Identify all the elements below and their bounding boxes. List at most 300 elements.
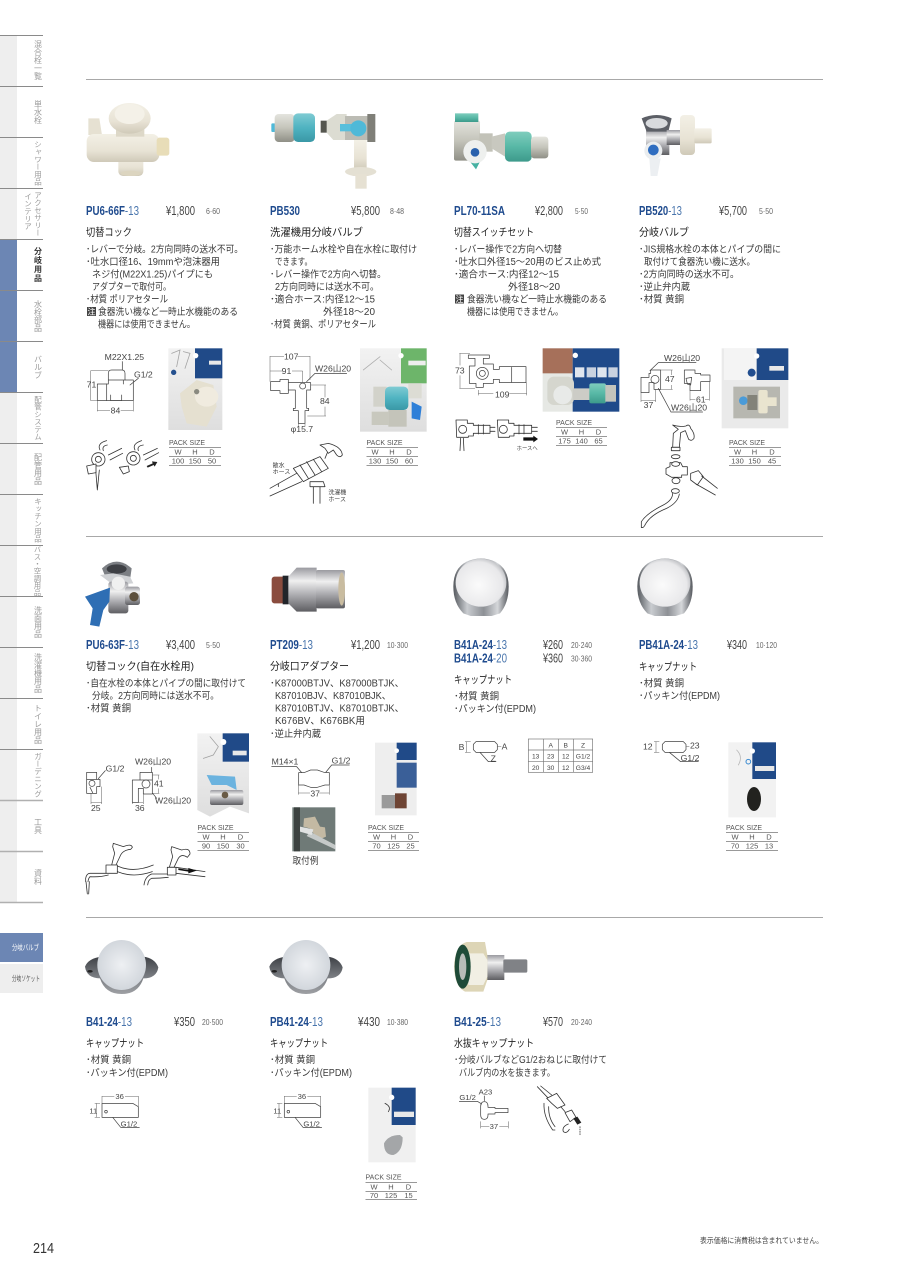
pack quantity: 10·300 bbox=[387, 640, 408, 650]
pack quantity: 10·380 bbox=[387, 1017, 408, 1027]
photo: cap nut with ears bbox=[269, 940, 343, 994]
size table: 12 bbox=[562, 765, 570, 772]
dimension drawing: 23 bbox=[690, 741, 700, 751]
product: PB41-24-13 bbox=[269, 940, 417, 1200]
pack size table: 15 bbox=[404, 1191, 413, 1200]
product: PB41A-24-13 bbox=[637, 558, 778, 850]
dimension drawing: 61 bbox=[696, 394, 706, 404]
installation sketch bbox=[270, 443, 346, 503]
product name: 切替コック bbox=[86, 226, 132, 238]
pack size table: 150 bbox=[386, 456, 398, 466]
size table bbox=[528, 739, 593, 772]
package photo bbox=[375, 743, 417, 815]
product: PB520-13 bbox=[639, 115, 788, 528]
model number: B41-25-13 bbox=[454, 1014, 501, 1029]
pack size table: 175 bbox=[558, 436, 571, 446]
specifications bbox=[86, 242, 243, 330]
specifications: 外径18〜20 bbox=[508, 280, 561, 293]
dimension drawing: G1/2 bbox=[134, 369, 153, 379]
specifications: ･材質 黄銅、ポリアセタール bbox=[270, 318, 376, 330]
sub tab: 分岐バルブ: 分岐バルブ bbox=[12, 942, 39, 952]
dimension drawing: 11 bbox=[273, 1106, 281, 1115]
specifications: ･自在水栓の本体とパイプの間に取付けて bbox=[86, 676, 246, 690]
dimension drawing: 71 bbox=[87, 379, 96, 389]
sidebar navigation tabs: ガーデニング bbox=[33, 752, 42, 798]
pack size table: PACK SIZE bbox=[198, 825, 234, 832]
package photo bbox=[168, 348, 222, 430]
dimension drawing bbox=[273, 1092, 322, 1129]
sidebar navigation tabs: 混合栓一覧 bbox=[34, 40, 42, 81]
pack size table: W bbox=[174, 448, 182, 456]
photo: chrome cap nut bbox=[453, 558, 509, 616]
size table: G3/4 bbox=[576, 765, 591, 772]
sidebar navigation tabs: 配管用品 bbox=[34, 453, 42, 486]
dimension drawing: 109 bbox=[495, 389, 510, 399]
pack quantity: 5·50 bbox=[206, 640, 220, 650]
specifications: ･材質 黄銅 bbox=[86, 1053, 131, 1066]
pack quantity: 5·50 bbox=[575, 206, 588, 216]
product: PL70-11SA bbox=[454, 113, 619, 452]
specifications: 食器洗い機など一時止水機能のある bbox=[467, 292, 607, 306]
size table: A bbox=[548, 742, 553, 749]
pack size table: W bbox=[371, 448, 379, 456]
pack size table: 125 bbox=[385, 1191, 397, 1200]
pack size table: D bbox=[769, 448, 775, 456]
pack size table: D bbox=[408, 832, 414, 842]
pack size table: 150 bbox=[189, 456, 201, 466]
size table: B bbox=[563, 742, 568, 749]
specifications: ･材質 黄銅 bbox=[639, 676, 684, 690]
photo: cream switching cock bbox=[87, 103, 169, 176]
pack size table: H bbox=[579, 428, 584, 436]
dimension drawing: 91 bbox=[282, 366, 291, 376]
dimension drawing bbox=[87, 757, 191, 813]
product: B41-25-13 bbox=[454, 942, 607, 1135]
dimension drawing: W26山20 bbox=[155, 796, 191, 806]
pack size table bbox=[729, 440, 781, 466]
product name: 分岐口アダプター bbox=[270, 660, 349, 672]
specifications bbox=[639, 676, 720, 702]
package photo bbox=[722, 348, 788, 428]
sidebar navigation tabs: 水栓部品 bbox=[34, 299, 42, 333]
pack size table: H bbox=[391, 832, 396, 842]
size table: 30 bbox=[547, 765, 555, 772]
pack size table: 30 bbox=[236, 842, 245, 850]
sidebar navigation tabs: 分岐用品 bbox=[34, 246, 42, 283]
specifications bbox=[639, 242, 781, 306]
sidebar navigation tabs: アクセサリー bbox=[34, 191, 42, 236]
dimension drawing bbox=[272, 755, 351, 798]
model number: PT209-13 bbox=[270, 637, 313, 652]
pack size table: 25 bbox=[406, 842, 415, 850]
price: ¥340 bbox=[726, 637, 747, 652]
photo: branch adapter bbox=[272, 568, 345, 612]
specifications bbox=[454, 1053, 607, 1079]
dimension drawing: W26山20 bbox=[135, 757, 171, 767]
pack size table: 70 bbox=[372, 842, 381, 850]
product name: 分岐バルブ bbox=[639, 226, 689, 238]
pack size table: 140 bbox=[575, 436, 588, 446]
installation sketch: ホースへ bbox=[517, 445, 538, 452]
prices: 20·240 bbox=[571, 640, 592, 650]
pack size table: 130 bbox=[731, 456, 744, 466]
specifications: ･適合ホース:内径12〜15 bbox=[270, 292, 376, 306]
dimension drawing: 37 bbox=[310, 788, 320, 798]
product: B41A-24 bbox=[453, 558, 593, 772]
prices: ¥360 bbox=[542, 650, 563, 666]
sidebar navigation tabs: キッチン用品 bbox=[34, 498, 42, 544]
size table: Z bbox=[581, 742, 585, 749]
pack size table: W bbox=[202, 832, 210, 842]
pack size table: W bbox=[373, 832, 381, 842]
specifications: ･JIS規格水栓の本体とパイプの間に bbox=[639, 242, 781, 256]
dimension drawing: 36 bbox=[115, 1092, 124, 1101]
pack size table: H bbox=[388, 1182, 394, 1192]
pack size table: 70 bbox=[731, 842, 739, 850]
size table: 12 bbox=[562, 754, 570, 761]
dimension drawing: G1/2 bbox=[681, 753, 700, 763]
dimension drawing: G1/2 bbox=[303, 1120, 320, 1129]
dimension drawing: 36 bbox=[298, 1092, 306, 1101]
pack size table: PACK SIZE bbox=[726, 825, 762, 832]
sidebar navigation tabs: 単水栓 bbox=[34, 99, 42, 125]
model numbers bbox=[454, 637, 507, 666]
photo: chrome cap nut bbox=[637, 558, 693, 616]
installation sketch: 洗濯機 bbox=[328, 488, 346, 496]
dimension drawing: φ15.7 bbox=[291, 424, 313, 434]
pack size table: W bbox=[734, 448, 742, 456]
pack size table bbox=[368, 825, 419, 850]
product name: 切替コック(自在水栓用) bbox=[86, 660, 194, 672]
package photo bbox=[728, 742, 776, 817]
size table: G1/2 bbox=[576, 754, 591, 761]
dimension drawing: G1/2 bbox=[106, 764, 125, 774]
sidebar navigation tabs: 資料 bbox=[34, 868, 42, 886]
product: PU6-63F-13 bbox=[85, 562, 249, 894]
dimension drawing bbox=[459, 1088, 508, 1131]
sidebar navigation tabs: バルブ bbox=[34, 355, 42, 379]
pack size table: 100 bbox=[172, 456, 184, 466]
dimension drawing: 107 bbox=[284, 351, 299, 361]
price: ¥430 bbox=[357, 1014, 380, 1029]
dimension drawing: Z bbox=[491, 754, 497, 764]
dimension drawing: 47 bbox=[665, 374, 675, 384]
specifications: ･分岐バルブなどG1/2おねじに取付けて bbox=[454, 1053, 607, 1066]
product: PT209-13 bbox=[270, 568, 419, 867]
pack size table: W bbox=[370, 1182, 378, 1192]
dimension drawing: W26山20 bbox=[671, 403, 707, 413]
price: ¥5,700 bbox=[718, 203, 747, 218]
specifications: アダプターで取付可。 bbox=[92, 280, 171, 293]
specifications: 機器には使用できません。 bbox=[467, 305, 563, 318]
sidebar navigation tabs: シャワー用品 bbox=[34, 140, 42, 187]
pack quantity: 8·48 bbox=[390, 206, 404, 216]
dimension drawing: W26山20 bbox=[664, 353, 700, 363]
dimension drawing: 41 bbox=[154, 779, 164, 789]
model number: PB41A-24-13 bbox=[639, 637, 698, 652]
product name: キャップナット bbox=[454, 674, 512, 686]
pack size table: H bbox=[389, 448, 395, 456]
specifications: 分岐。2方向同時には送水不可。 bbox=[92, 689, 219, 702]
dimension drawing: W26山20 bbox=[315, 364, 351, 374]
prices: ¥260 bbox=[542, 637, 563, 652]
dimension drawing: M22X1.25 bbox=[105, 352, 144, 362]
installation sketch bbox=[87, 441, 159, 490]
specifications: ･材質 黄銅 bbox=[454, 690, 499, 702]
price: ¥350 bbox=[173, 1014, 195, 1029]
dimension drawing: G1/2 bbox=[121, 1120, 137, 1129]
specifications bbox=[270, 242, 417, 330]
model number: PU6-66F-13 bbox=[86, 203, 139, 218]
specifications: 2方向同時には送水不可。 bbox=[275, 280, 379, 293]
pack size table: D bbox=[406, 1182, 412, 1192]
product: B41-24-13 bbox=[85, 940, 223, 1129]
specifications bbox=[86, 676, 246, 714]
dimension drawing bbox=[643, 741, 700, 763]
product name: キャップナット bbox=[270, 1038, 328, 1050]
pack size table bbox=[726, 825, 778, 850]
pack size table: W bbox=[731, 832, 739, 842]
specifications bbox=[270, 1053, 352, 1079]
pack size table: PACK SIZE bbox=[366, 440, 403, 447]
specifications: K676BV、K676BK用 bbox=[275, 716, 365, 727]
pack size table: H bbox=[220, 832, 226, 842]
installation sketch: 散水 bbox=[273, 461, 285, 469]
model number: PB520-13 bbox=[639, 203, 682, 218]
pack quantity: 5·50 bbox=[759, 206, 773, 216]
price: ¥5,800 bbox=[350, 203, 380, 218]
specifications: ･逆止弁内蔵 bbox=[639, 280, 690, 293]
dimension drawing: 36 bbox=[135, 803, 145, 813]
model number: B41-24-13 bbox=[86, 1014, 132, 1029]
model number: PB41-24-13 bbox=[270, 1014, 323, 1029]
size table: 23 bbox=[547, 754, 555, 761]
price: ¥570 bbox=[542, 1014, 563, 1029]
divider lines bbox=[86, 80, 823, 918]
specifications: ･パッキン付(EPDM) bbox=[270, 1067, 352, 1079]
installation sketch: ホース bbox=[328, 496, 346, 503]
sidebar navigation tabs: トイレ用品 bbox=[34, 704, 42, 745]
product name: 水抜キャップナット bbox=[454, 1036, 534, 1050]
specifications: 外径18〜20 bbox=[323, 305, 376, 318]
specifications: ･万能ホーム水栓や自在水栓に取付け bbox=[270, 242, 417, 256]
product name: キャップナット bbox=[86, 1038, 144, 1050]
specifications: ･2方向同時の送水不可。 bbox=[639, 268, 739, 280]
pack size table: 130 bbox=[369, 456, 381, 466]
pack size table bbox=[556, 420, 607, 446]
page number: 214 bbox=[33, 1240, 54, 1257]
specifications: 注 bbox=[456, 294, 464, 304]
pack size table: PACK SIZE bbox=[366, 1174, 402, 1182]
specifications: K87010BJV、K87010BJK、 bbox=[275, 691, 391, 702]
sidebar navigation tabs: 洗濯機用品 bbox=[34, 652, 42, 694]
pack quantity: 20·240 bbox=[571, 1017, 592, 1027]
model number: PU6-63F-13 bbox=[86, 637, 139, 652]
installation sketch bbox=[537, 1086, 581, 1135]
dimension drawing bbox=[87, 352, 153, 415]
specifications: ･材質 黄銅 bbox=[639, 292, 684, 306]
pack size table: PACK SIZE bbox=[729, 440, 765, 447]
dimension drawing bbox=[270, 351, 351, 434]
prices bbox=[542, 637, 592, 666]
package photo bbox=[368, 1088, 416, 1162]
pack size table bbox=[198, 825, 249, 850]
model number: PL70-11SA bbox=[454, 203, 505, 218]
specifications: 取付けて食器洗い機に送水。 bbox=[644, 255, 755, 268]
product name: 切替スイッチセット bbox=[454, 226, 534, 238]
caption: 取付例 bbox=[292, 855, 318, 867]
specifications: 機器には使用できません。 bbox=[98, 318, 195, 330]
pack size table: W bbox=[561, 428, 569, 436]
specifications: 食器洗い機など一時止水機能のある bbox=[98, 305, 238, 318]
dimension drawing: 84 bbox=[320, 396, 330, 406]
pack quantity: 6·60 bbox=[206, 206, 220, 216]
dimension drawing: 25 bbox=[91, 803, 101, 813]
installation sketch: ホース bbox=[273, 469, 290, 476]
dimension drawing: 37 bbox=[644, 400, 653, 410]
model numbers: B41A-24-20 bbox=[454, 650, 507, 666]
pack size table: D bbox=[596, 428, 602, 436]
specifications: ･適合ホース:内径12〜15 bbox=[454, 268, 560, 280]
package photo bbox=[197, 733, 249, 817]
pack size table: 50 bbox=[208, 456, 216, 466]
package photo bbox=[543, 348, 619, 412]
specifications bbox=[454, 690, 536, 715]
dimension drawing: A bbox=[502, 742, 508, 752]
sidebar navigation tabs: インテリア bbox=[24, 192, 32, 230]
product: PU6-66F-13 bbox=[86, 103, 243, 490]
pack quantity: 20·500 bbox=[202, 1017, 223, 1027]
pack size table: D bbox=[766, 832, 772, 842]
dimension drawing: 84 bbox=[111, 405, 120, 415]
specifications: ･レバーで分岐。2方向同時の送水不可。 bbox=[86, 242, 243, 256]
pack size table bbox=[366, 1174, 417, 1200]
sidebar navigation tabs: バス・空調用品 bbox=[34, 546, 42, 597]
dimension drawing bbox=[89, 1092, 139, 1129]
specifications: ネジ付(M22X1.25)パイプにも bbox=[92, 268, 213, 280]
dimension drawing bbox=[459, 742, 508, 764]
sidebar navigation tabs: 配管システム bbox=[33, 395, 42, 441]
dimension drawing: 37 bbox=[490, 1122, 498, 1131]
pack size table: 150 bbox=[217, 842, 229, 850]
price: ¥2,800 bbox=[534, 203, 563, 218]
pack size table: 150 bbox=[748, 456, 761, 466]
specifications: K87010BTJV、K87010BTJK、 bbox=[275, 704, 404, 714]
sub tab: 分岐ソケット: 分岐ソケット bbox=[12, 973, 40, 983]
pack size table: 70 bbox=[370, 1191, 378, 1200]
photo: chrome cock with blue lever bbox=[85, 562, 140, 627]
sub tab: 分岐バルブ bbox=[0, 933, 43, 962]
product name: キャップナット bbox=[639, 661, 697, 673]
model number: PB530 bbox=[270, 203, 300, 218]
dimension drawing: A23 bbox=[479, 1088, 492, 1097]
pack size table: 125 bbox=[387, 842, 400, 850]
specifications: ･逆止弁内蔵 bbox=[270, 727, 321, 740]
photo: cap nut with ears bbox=[85, 940, 158, 994]
specifications: ･材質 黄銅 bbox=[270, 1053, 315, 1066]
tax footnote: 表示価格に消費税は含まれていません。 bbox=[700, 1235, 823, 1245]
dimension drawing: B bbox=[459, 742, 465, 752]
specifications: ･レバー操作で2方向へ切替。 bbox=[270, 268, 386, 280]
dimension drawing: 12 bbox=[643, 742, 653, 752]
price: ¥1,800 bbox=[165, 203, 195, 218]
photo: washing machine branch valve bbox=[271, 113, 376, 189]
price: ¥1,200 bbox=[350, 637, 380, 652]
pack size table bbox=[169, 440, 221, 466]
specifications: ･吐水口径16、19mmや泡沫器用 bbox=[86, 255, 220, 268]
dimension drawing bbox=[641, 353, 710, 413]
package photo bbox=[360, 348, 427, 432]
pack size table: PACK SIZE bbox=[169, 440, 205, 447]
specifications: ･レバー操作で2方向へ切替 bbox=[454, 242, 562, 256]
specifications: できます。 bbox=[275, 256, 312, 268]
installation sketch bbox=[456, 420, 538, 452]
sidebar navigation tabs: 洗面用品 bbox=[34, 605, 42, 639]
prices: 30·360 bbox=[571, 654, 592, 664]
sub tab: 分岐ソケット bbox=[0, 964, 43, 993]
dimension drawing bbox=[455, 353, 527, 399]
price: ¥3,400 bbox=[165, 637, 195, 652]
specifications: ･パッキン付(EPDM) bbox=[454, 703, 536, 715]
specifications: ･材質 ポリアセタール bbox=[86, 292, 168, 306]
pack size table: 60 bbox=[405, 456, 413, 466]
size table: 13 bbox=[532, 754, 540, 761]
photo: drain cap nut bbox=[454, 942, 527, 992]
installation example photo bbox=[292, 807, 335, 851]
dimension drawing: 73 bbox=[455, 365, 465, 375]
dimension drawing: G1/2 bbox=[332, 755, 351, 765]
photo: switch set bbox=[454, 113, 548, 169]
photo: branch valve bbox=[642, 115, 712, 176]
specifications: ･パッキン付(EPDM) bbox=[639, 690, 720, 702]
pack size table: 13 bbox=[765, 842, 773, 850]
pack size table: PACK SIZE bbox=[556, 420, 592, 427]
pack size table: PACK SIZE bbox=[368, 825, 404, 832]
specifications: ･パッキン付(EPDM) bbox=[86, 1067, 168, 1079]
pack size table: H bbox=[192, 448, 198, 456]
pack quantity: 10·120 bbox=[756, 640, 777, 650]
sidebar navigation tabs bbox=[0, 36, 43, 903]
installation sketch bbox=[641, 425, 717, 528]
pack size table bbox=[366, 440, 418, 466]
size table: 20 bbox=[532, 765, 540, 772]
specifications bbox=[270, 678, 404, 740]
specifications: ･K87000BTJV、K87000BTJK、 bbox=[270, 678, 404, 690]
pack size table: D bbox=[238, 832, 244, 842]
pack size table: 45 bbox=[768, 456, 776, 466]
specifications: バルブ内の水を抜きます。 bbox=[459, 1066, 555, 1079]
pack size table: 65 bbox=[594, 436, 603, 446]
dimension drawing: G1/2 bbox=[459, 1093, 476, 1102]
model numbers: B41A-24-13 bbox=[454, 637, 507, 652]
specifications: 注 bbox=[88, 307, 96, 317]
pack size table: 125 bbox=[746, 842, 758, 850]
dimension drawing: M14×1 bbox=[272, 757, 299, 767]
sidebar navigation tabs: 工具 bbox=[34, 818, 42, 835]
specifications bbox=[86, 1053, 168, 1079]
pack size table: H bbox=[749, 832, 755, 842]
pack size table: D bbox=[209, 448, 215, 456]
specifications: ･吐水口外径15〜20用のビス止め式 bbox=[454, 255, 601, 268]
pack size table: H bbox=[752, 448, 757, 456]
product name: 洗濯機用分岐バルブ bbox=[270, 226, 363, 238]
pack size table: D bbox=[406, 448, 412, 456]
specifications: ･材質 黄銅 bbox=[86, 702, 131, 714]
installation sketch bbox=[86, 843, 205, 894]
product: PB530 bbox=[270, 113, 427, 503]
pack size table: 90 bbox=[202, 842, 210, 850]
dimension drawing: 11 bbox=[89, 1106, 97, 1115]
